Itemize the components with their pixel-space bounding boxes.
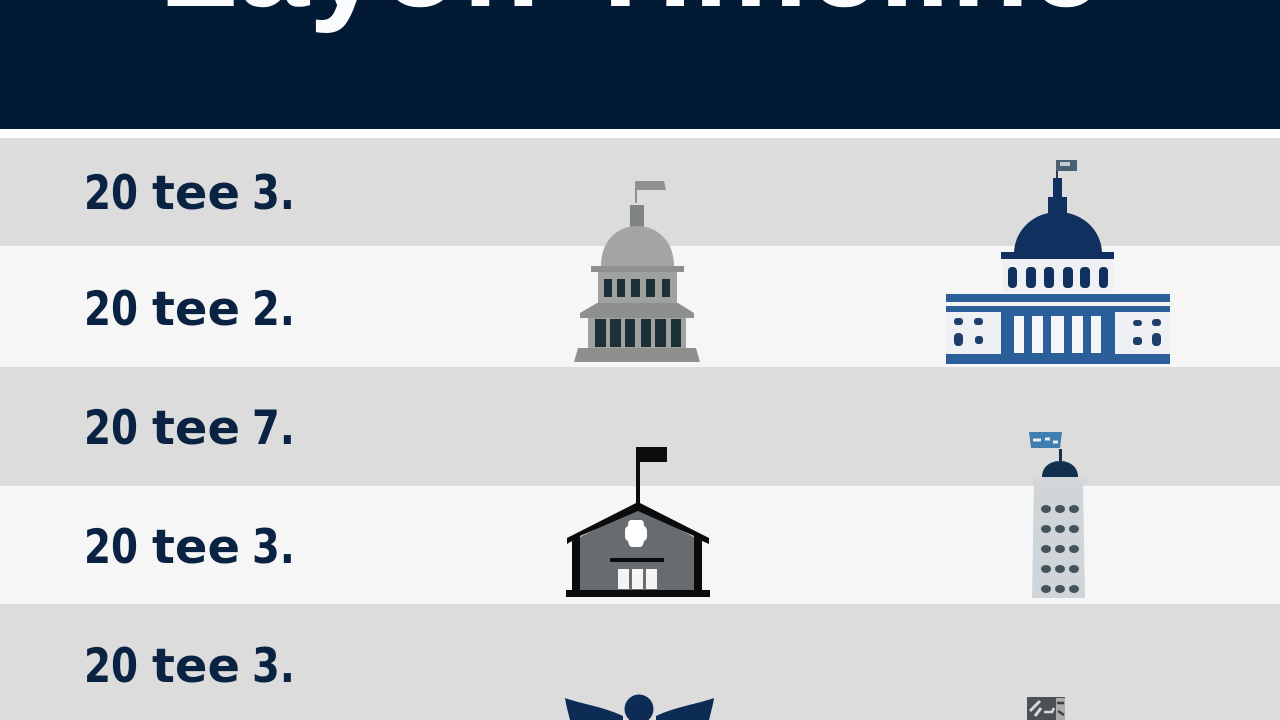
icon: black-roofed building — [566, 447, 710, 597]
row band 1 — [0, 138, 1280, 246]
date label 3: 20 — [84, 401, 138, 456]
date label 2 — [84, 282, 295, 337]
date label 4: 3. — [252, 520, 295, 575]
date label 1: tee — [152, 166, 240, 221]
date label 1 — [84, 166, 295, 221]
row band 4 — [0, 486, 1280, 604]
icon: winged emblem — [565, 694, 714, 720]
date label 5: tee — [152, 639, 240, 694]
date label 2: tee — [152, 282, 240, 337]
row band 5 — [0, 604, 1280, 720]
date label 5 — [84, 639, 295, 694]
date label 1: 20 — [84, 166, 138, 221]
row band 3 — [0, 367, 1280, 486]
date label 5: 3. — [252, 639, 295, 694]
header band — [0, 0, 1280, 129]
date label 5: 20 — [84, 639, 138, 694]
date label 4 — [84, 520, 295, 575]
date label 3: tee — [152, 401, 240, 456]
date label 3: 7. — [252, 401, 295, 456]
date label 3 — [84, 401, 295, 456]
icon: grey capitol — [574, 181, 700, 362]
date label 4: tee — [152, 520, 240, 575]
date label 1: 3. — [252, 166, 295, 221]
date label 4: 20 — [84, 520, 138, 575]
icon: blue capitol — [946, 160, 1170, 364]
row band 2 — [0, 246, 1280, 367]
date label 2: 20 — [84, 282, 138, 337]
date label 2: 2. — [252, 282, 295, 337]
icon: patterned square — [1027, 697, 1065, 720]
icon: tower — [1029, 432, 1088, 598]
